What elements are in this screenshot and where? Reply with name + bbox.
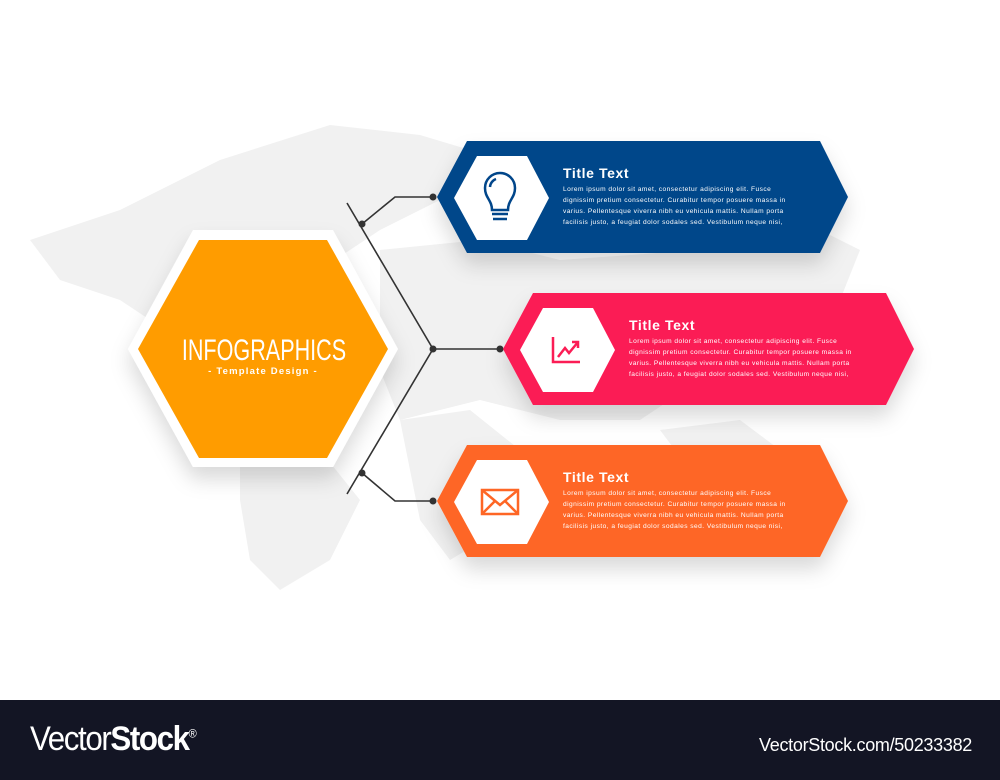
banner 2: facilisis justo, a feugiat dolor sodales sed. Vestibulum neque nisi, <box>629 371 849 378</box>
banner 1: varius. Pellentesque viverra nibh eu vehicula mattis. Nullam porta <box>563 208 784 215</box>
banner 3: Title Text <box>563 469 629 485</box>
central hexagon <box>128 230 398 467</box>
world map background <box>30 125 860 590</box>
banner 1: facilisis justo, a feugiat dolor sodales sed. Vestibulum neque nisi, <box>563 219 783 226</box>
icon: bulb <box>485 173 515 219</box>
icon: chart <box>553 337 580 362</box>
banner 3: facilisis justo, a feugiat dolor sodales sed. Vestibulum neque nisi, <box>563 523 783 530</box>
central hexagon: - Template Design - <box>208 366 318 377</box>
banner 1: dignissim pretium consectetur. Curabitur tempor posuere massa in <box>563 197 786 204</box>
banner 1: Lorem ipsum dolor sit amet, consectetur adipiscing elit. Fusce <box>563 186 771 193</box>
banner 2: Lorem ipsum dolor sit amet, consectetur adipiscing elit. Fusce <box>629 338 837 345</box>
banner 1 <box>437 141 848 253</box>
banner 3: dignissim pretium consectetur. Curabitur tempor posuere massa in <box>563 501 786 508</box>
banner 2 <box>503 293 914 405</box>
footer <box>0 700 1000 780</box>
footer url: VectorStock.com/50233382 <box>759 735 972 755</box>
banner 2: Title Text <box>629 317 695 333</box>
connector lines <box>347 194 504 504</box>
banner 2: dignissim pretium consectetur. Curabitur tempor posuere massa in <box>629 349 852 356</box>
banner 3 <box>437 445 848 557</box>
central hexagon: INFOGRAPHICS <box>182 332 346 367</box>
footer logo: VectorStock® <box>30 720 195 758</box>
icon: envelope <box>482 490 518 514</box>
banner 3: varius. Pellentesque viverra nibh eu vehicula mattis. Nullam porta <box>563 512 784 519</box>
banner 2: varius. Pellentesque viverra nibh eu vehicula mattis. Nullam porta <box>629 360 850 367</box>
banner 3: Lorem ipsum dolor sit amet, consectetur adipiscing elit. Fusce <box>563 490 771 497</box>
banner 1: Title Text <box>563 165 629 181</box>
